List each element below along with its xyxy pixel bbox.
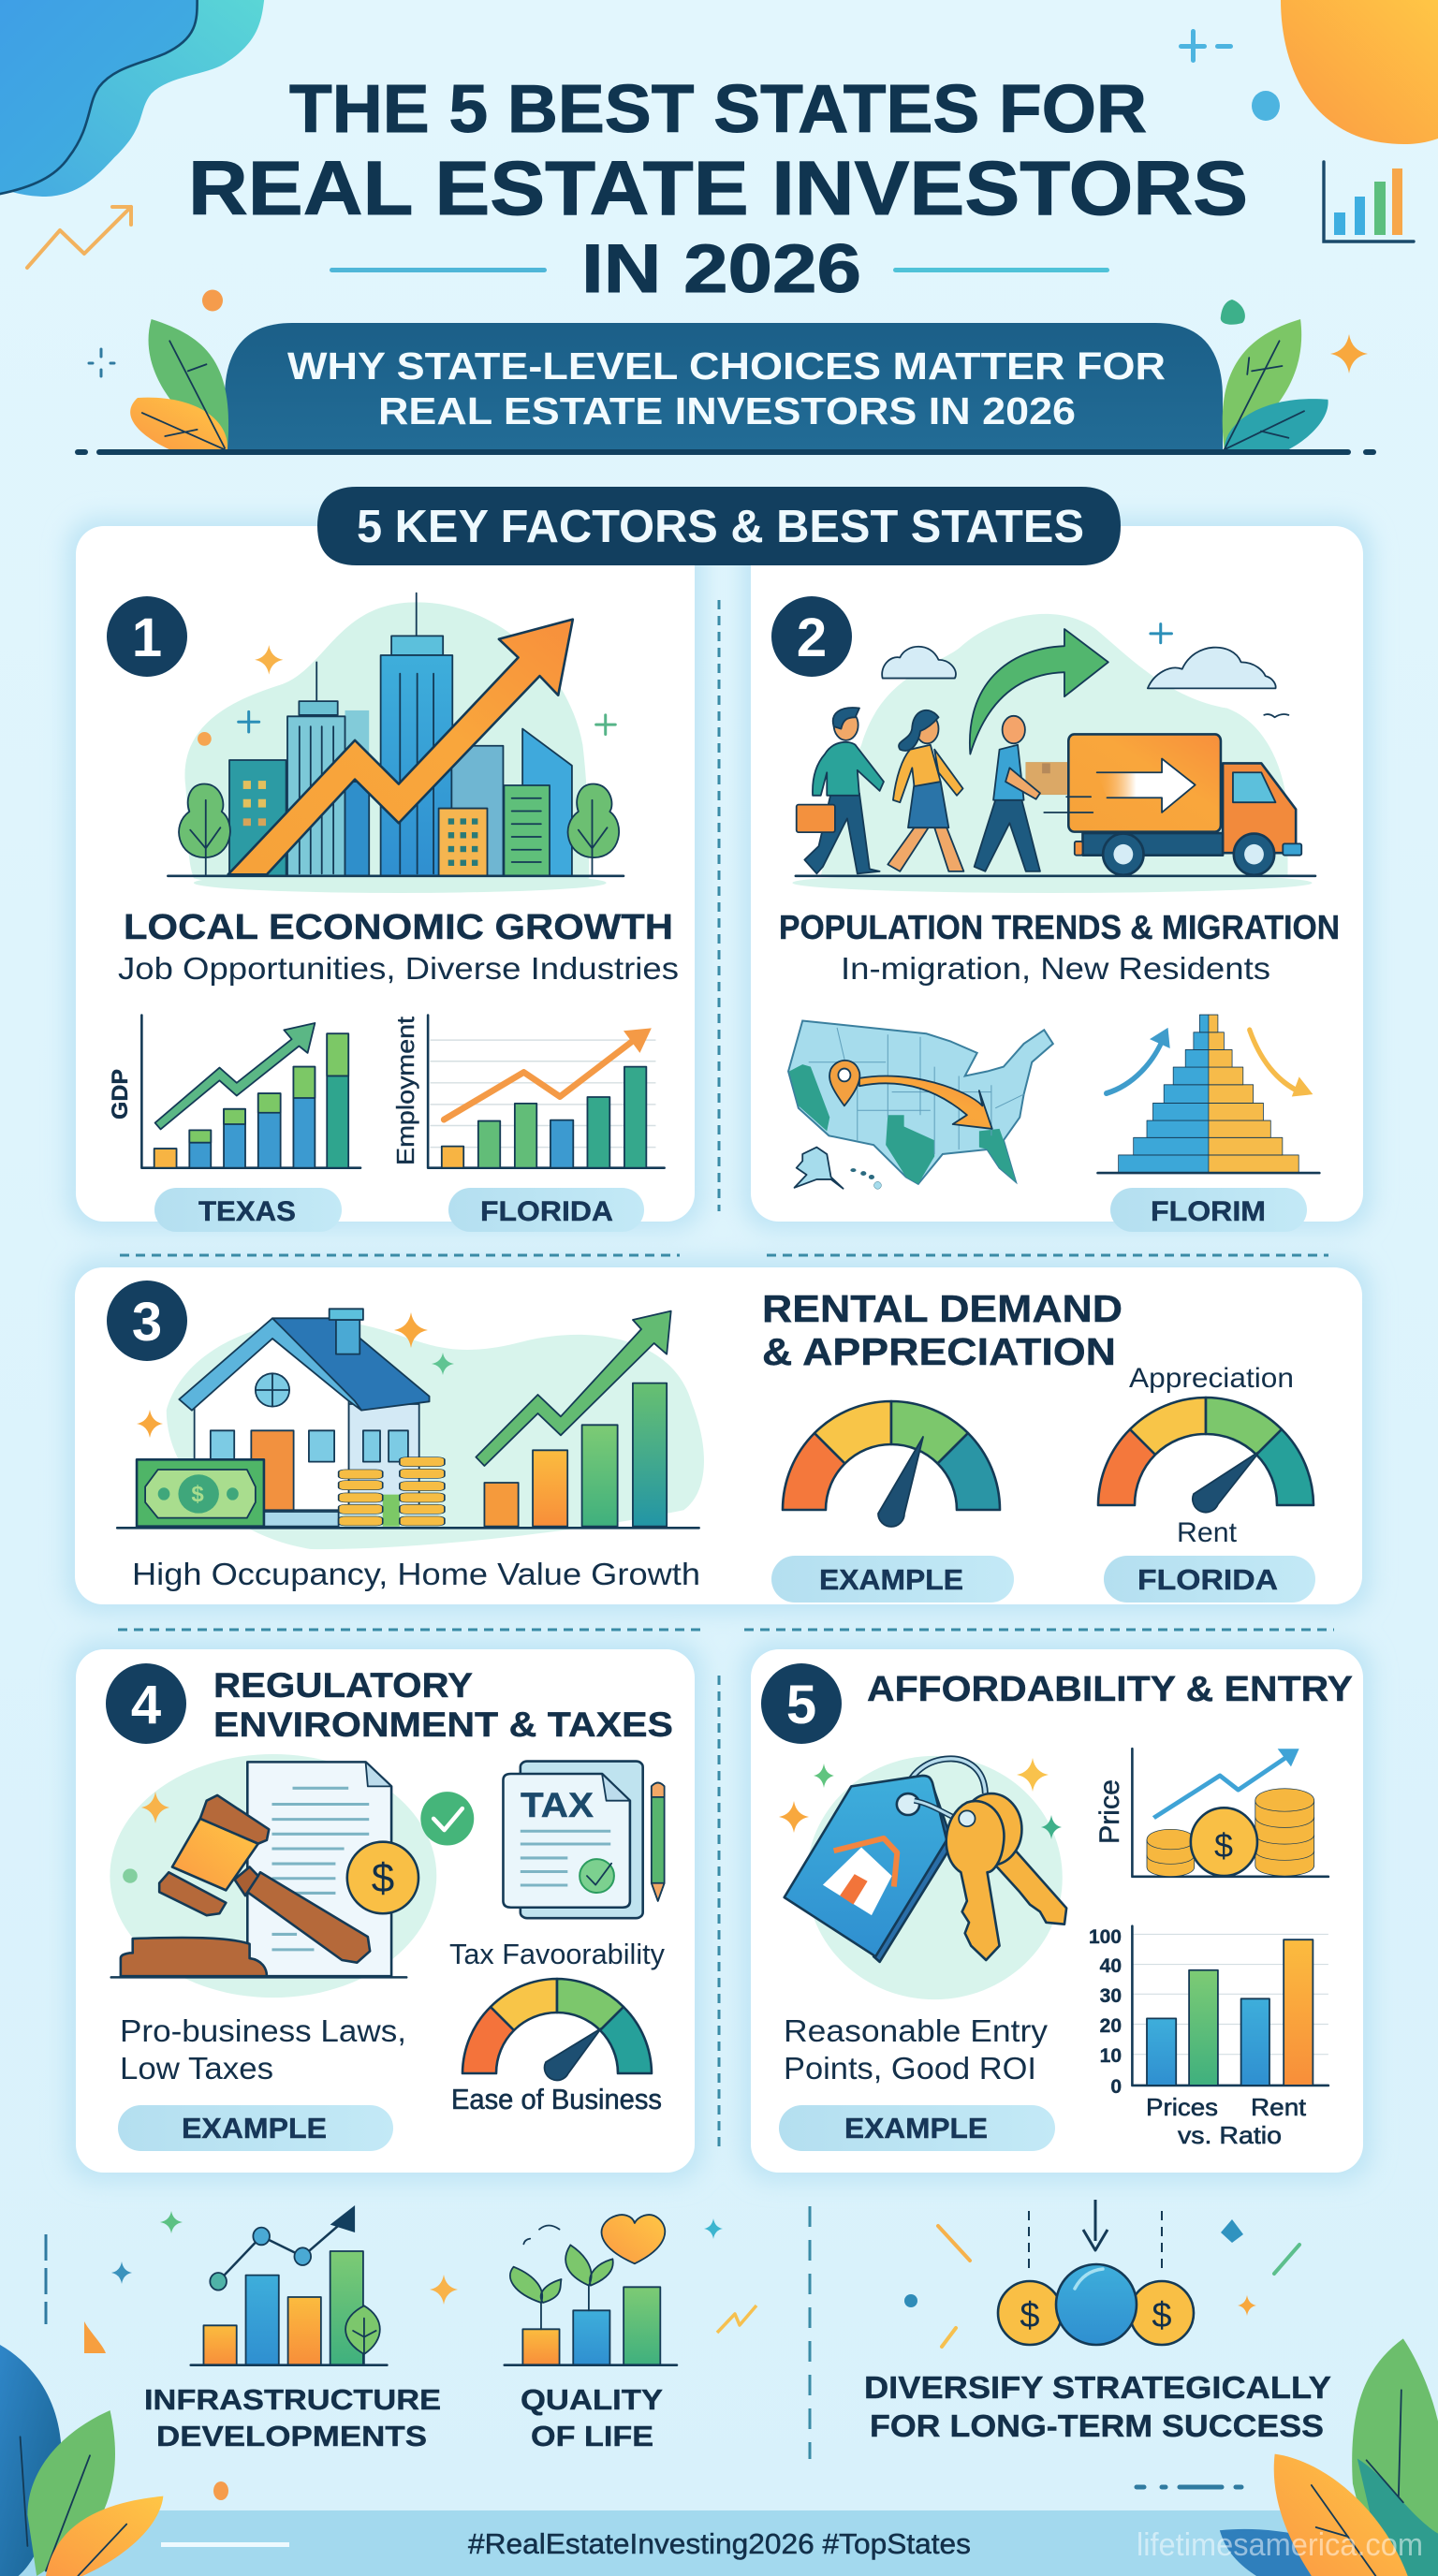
chart: Employment Florida: Employment bbox=[391, 1016, 419, 1165]
panel 1: local economic growth bbox=[76, 526, 695, 1232]
label: FOR LONG-TERM SUCCESS bbox=[870, 2408, 1324, 2443]
number badge 1 bbox=[107, 596, 187, 677]
panel glows bbox=[66, 518, 1372, 2182]
label pill: Florim bbox=[1110, 1188, 1307, 1232]
heading: RENTAL DEMAND bbox=[762, 1287, 1123, 1330]
illustration: people moving with truck bbox=[792, 614, 1315, 893]
divider dashes bbox=[118, 600, 1334, 2146]
description bbox=[784, 2013, 1049, 2086]
chart: prices vs rent ratio: 0 bbox=[1110, 2076, 1122, 2098]
decorative dots bbox=[89, 290, 1368, 376]
chart: prices vs rent ratio: 30 bbox=[1100, 1985, 1122, 2007]
label bbox=[521, 2383, 663, 2452]
heading: & APPRECIATION bbox=[762, 1330, 1116, 1373]
heading bbox=[762, 1287, 1123, 1373]
number badge 1: 1 bbox=[132, 607, 162, 668]
number badge 2 bbox=[771, 596, 852, 677]
chart: prices vs rent ratio bbox=[1089, 1926, 1328, 2149]
heading: POPULATION TRENDS & MIGRATION bbox=[779, 908, 1340, 946]
person 3 bbox=[975, 800, 1040, 871]
illustration: city skyline with rising arrow bbox=[168, 593, 624, 893]
description: Pro-business Laws, bbox=[120, 2013, 406, 2048]
label: Tax Favoorability bbox=[449, 1938, 665, 1970]
decorative leaves bottom right bbox=[1220, 2338, 1438, 2576]
number badge 5: 5 bbox=[786, 1675, 816, 1735]
description bbox=[120, 2013, 406, 2086]
illustration: tax document bbox=[503, 1762, 665, 1918]
illustration: tax document: TAX bbox=[521, 1786, 594, 1824]
chart: prices vs rent ratio: 10 bbox=[1100, 2045, 1122, 2067]
person 2 bbox=[888, 827, 963, 871]
label pill: Florida bbox=[448, 1188, 644, 1232]
label pill: Florida: FLORIDA bbox=[480, 1196, 613, 1227]
panel 3: rental demand and appreciation bbox=[75, 1267, 1362, 1604]
title: IN 2026 bbox=[581, 231, 861, 307]
confetti decorations bbox=[904, 2219, 1299, 2487]
subtitle banner: WHY STATE-LEVEL CHOICES MATTER FOR bbox=[287, 344, 1166, 388]
panel 2: population trends and migration bbox=[751, 526, 1363, 1232]
panel 4: regulatory environment and taxes bbox=[76, 1649, 695, 2173]
heading: REGULATORY bbox=[213, 1666, 473, 1705]
section heading pill: 5 KEY FACTORS & BEST STATES bbox=[357, 502, 1084, 552]
description: Points, Good ROI bbox=[784, 2051, 1036, 2086]
label: DEVELOPMENTS bbox=[156, 2420, 427, 2452]
description: High Occupancy, Home Value Growth bbox=[132, 1557, 700, 1591]
description: In-migration, New Residents bbox=[841, 951, 1270, 986]
label pill: Texas: TEXAS bbox=[198, 1196, 296, 1227]
heading: AFFORDABILITY & ENTRY bbox=[867, 1670, 1353, 1709]
label pill: example bbox=[118, 2105, 393, 2151]
watermark: lifetimesamerica.com bbox=[1137, 2527, 1423, 2563]
label bbox=[864, 2370, 1331, 2443]
chart: prices vs rent ratio: Prices bbox=[1146, 2093, 1218, 2121]
scattered decorations bbox=[46, 2211, 756, 2500]
label: QUALITY bbox=[521, 2383, 663, 2416]
chart: Employment Florida bbox=[391, 1016, 665, 1168]
number badge 3 bbox=[107, 1281, 187, 1361]
chart: GDP Texas bbox=[108, 1016, 360, 1168]
title bbox=[188, 72, 1248, 307]
description: Reasonable Entry bbox=[784, 2013, 1049, 2048]
decorative corner blob top left bbox=[0, 0, 264, 197]
chart: prices vs rent ratio: Rent bbox=[1251, 2093, 1307, 2121]
label: INFRASTRUCTURE bbox=[144, 2383, 441, 2416]
icon: diversify coins and globe bbox=[998, 2200, 1194, 2345]
gauge: ease of business bbox=[462, 1979, 652, 2080]
chart: price coins: $ bbox=[1214, 1826, 1233, 1865]
chart: prices vs rent ratio: 100 bbox=[1089, 1926, 1122, 1948]
truck bbox=[1223, 763, 1296, 853]
chart: GDP Texas: GDP bbox=[108, 1069, 133, 1120]
chart: prices vs rent ratio: 20 bbox=[1100, 2015, 1122, 2037]
decorative corner blob top right bbox=[1281, 0, 1438, 144]
label pill: Florida bbox=[1104, 1556, 1315, 1603]
map: US migration bbox=[788, 1020, 1053, 1189]
panel 3: rental demand and appreciation: $ bbox=[191, 1482, 204, 1507]
illustration: gavel and document bbox=[110, 1754, 474, 1998]
decorative sparkles bbox=[137, 1312, 454, 1438]
label bbox=[144, 2383, 441, 2452]
icon: quality of life bbox=[505, 2215, 677, 2365]
footer band bbox=[0, 2510, 1438, 2576]
label pill: example bbox=[771, 1556, 1014, 1603]
chart: price coins: Price bbox=[1094, 1779, 1125, 1844]
chart: price coins bbox=[1094, 1749, 1328, 1877]
decorative sparkles bbox=[779, 1758, 1062, 1839]
illustration: house, cash, coins and growth bars bbox=[117, 1309, 704, 1549]
illustration: gavel and document: $ bbox=[372, 1855, 394, 1901]
gauge: Florida: Rent bbox=[1177, 1517, 1238, 1548]
label pill: example: EXAMPLE bbox=[844, 2112, 988, 2144]
person 1 bbox=[804, 793, 880, 873]
label: OF LIFE bbox=[531, 2420, 653, 2452]
title: THE 5 BEST STATES FOR bbox=[289, 72, 1147, 147]
gauge: example bbox=[783, 1401, 1000, 1527]
label pill: example bbox=[779, 2105, 1055, 2151]
heading: LOCAL ECONOMIC GROWTH bbox=[124, 908, 673, 947]
label pill: Florida: FLORIDA bbox=[1137, 1563, 1278, 1596]
icon: infrastructure developments bbox=[191, 2205, 387, 2365]
chart: population pyramid bbox=[1098, 1015, 1319, 1173]
vertical divider bbox=[809, 2206, 811, 2459]
icon: plus and minus bbox=[1179, 29, 1233, 63]
heading: ENVIRONMENT & TAXES bbox=[213, 1705, 673, 1744]
label pill: Texas bbox=[154, 1188, 342, 1232]
subtitle banner bbox=[75, 319, 1376, 455]
chart: prices vs rent ratio: 40 bbox=[1100, 1955, 1122, 1977]
label pill: example: EXAMPLE bbox=[819, 1563, 963, 1596]
footer accent line bbox=[161, 2542, 289, 2547]
label pill: example: EXAMPLE bbox=[182, 2112, 327, 2144]
chart: prices vs rent ratio: vs. Ratio bbox=[1178, 2121, 1282, 2149]
label: Ease of Business bbox=[451, 2083, 662, 2115]
section heading pill bbox=[317, 487, 1121, 565]
number badge 5 bbox=[761, 1663, 842, 1744]
gauge: Florida: Appreciation bbox=[1129, 1363, 1294, 1394]
number badge 4: 4 bbox=[131, 1675, 161, 1735]
description: Job Opportunities, Diverse Industries bbox=[118, 951, 679, 986]
number badge 4 bbox=[106, 1663, 186, 1744]
icon: mini bar chart bbox=[1324, 162, 1414, 242]
footer hashtags: #RealEstateInvesting2026 #TopStates bbox=[468, 2527, 971, 2560]
decorative leaves bottom left bbox=[0, 2345, 163, 2576]
icon: rising arrow bbox=[27, 207, 131, 268]
icon: diversify coins and globe: $ bbox=[1020, 2296, 1040, 2335]
description: Low Taxes bbox=[120, 2051, 273, 2086]
heading bbox=[213, 1666, 673, 1744]
number badge 2: 2 bbox=[797, 607, 827, 668]
title: REAL ESTATE INVESTORS bbox=[188, 146, 1248, 231]
number badge 3: 3 bbox=[132, 1292, 162, 1353]
gauge: Florida bbox=[1098, 1363, 1313, 1548]
illustration: key tag and keys bbox=[785, 1756, 1066, 1999]
label: DIVERSIFY STRATEGICALLY bbox=[864, 2370, 1331, 2405]
icon: blue dot bbox=[1252, 91, 1280, 121]
panel 5: affordability and entry bbox=[751, 1649, 1363, 2173]
icon: diversify coins and globe: $ bbox=[1152, 2296, 1172, 2335]
subtitle banner: REAL ESTATE INVESTORS IN 2026 bbox=[378, 389, 1076, 432]
label pill: Florim: FLORIM bbox=[1151, 1196, 1266, 1227]
